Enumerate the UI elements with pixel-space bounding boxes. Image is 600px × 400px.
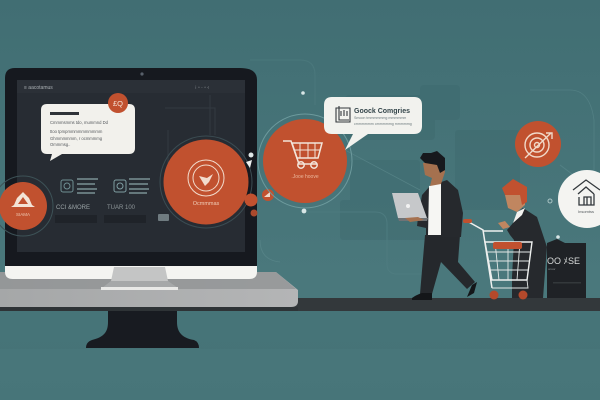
shirt — [428, 183, 441, 235]
boy shirt — [513, 208, 525, 223]
screen faint chart lines — [165, 95, 215, 165]
badge on bubble: £Q — [113, 99, 123, 108]
head — [423, 160, 445, 186]
left warning circle — [0, 176, 53, 236]
small button — [158, 214, 169, 221]
monitor body — [5, 68, 257, 266]
dashboard label left: CCI &MORE — [56, 205, 90, 211]
monitor stand foot — [86, 310, 199, 348]
callout bubble: Goock Comgries — [354, 108, 410, 115]
boy hand — [498, 221, 510, 229]
dashboard label right: TUAR 100 — [107, 205, 136, 211]
legs — [420, 235, 475, 294]
speech bubble: ttoo tpmpmmmmmmmmmm — [50, 129, 103, 134]
speech bubble: Ommmsg.. — [50, 142, 70, 147]
webcam — [140, 72, 144, 76]
callout bubble: cmmmmmm ommmmmg mmmmmg — [354, 122, 412, 126]
jacket — [417, 180, 463, 237]
icon: shopping cart — [283, 141, 322, 168]
dark bag with label: OO ﾒSE — [547, 256, 580, 266]
monitor base plate — [102, 281, 178, 288]
screen header text: ≡ aacotamus — [24, 85, 53, 91]
walking man with laptop — [392, 151, 477, 300]
floor bar — [290, 298, 600, 311]
dark bag with label — [547, 239, 586, 298]
shadow under floor — [0, 311, 600, 349]
house circle — [558, 170, 600, 228]
cart circle — [258, 114, 352, 208]
input field right — [104, 215, 146, 223]
cart circle: .Jooe hoove — [291, 174, 319, 180]
callout bubble: Smoon tmmmmmmg mmmmmm — [354, 116, 406, 120]
left warning circle: SIAMA — [16, 212, 30, 217]
monitor neck — [111, 267, 168, 281]
boy head — [505, 193, 525, 212]
monitor — [5, 68, 257, 290]
monitor white chin — [5, 266, 257, 279]
hands — [405, 217, 424, 222]
large circle: target — [160, 136, 252, 228]
icon: document — [336, 106, 350, 122]
network dots — [301, 91, 560, 239]
speech bubble: Cmmmsmms tdo, mummnd Dd — [50, 120, 109, 125]
screen — [17, 80, 245, 252]
target circle — [515, 121, 561, 167]
speech bubble — [41, 104, 135, 161]
large circle: target: Ocmmmas — [193, 201, 220, 207]
laptop — [392, 193, 427, 218]
shopping cart — [463, 219, 532, 300]
callout bubble — [324, 97, 422, 150]
input field left — [55, 215, 97, 223]
house circle: Insomtss — [578, 209, 594, 214]
boy hair — [502, 179, 527, 205]
badge on bubble — [108, 93, 128, 113]
dashboard icon left — [61, 179, 98, 193]
shoes — [412, 293, 432, 300]
desk — [0, 272, 298, 311]
hair — [420, 151, 445, 173]
dashboard icon right — [114, 179, 150, 193]
dark bag with label: onsor — [548, 267, 556, 271]
background network pattern — [250, 60, 594, 274]
screen toolbar icons: ⁝ ▫ · ▫ ‹ — [195, 85, 209, 91]
speech bubble: Ghmmmmmm, r ocmmmmg — [50, 136, 103, 141]
boy with cart — [498, 179, 547, 298]
small connector nodes — [244, 152, 274, 216]
boy body — [507, 208, 547, 298]
